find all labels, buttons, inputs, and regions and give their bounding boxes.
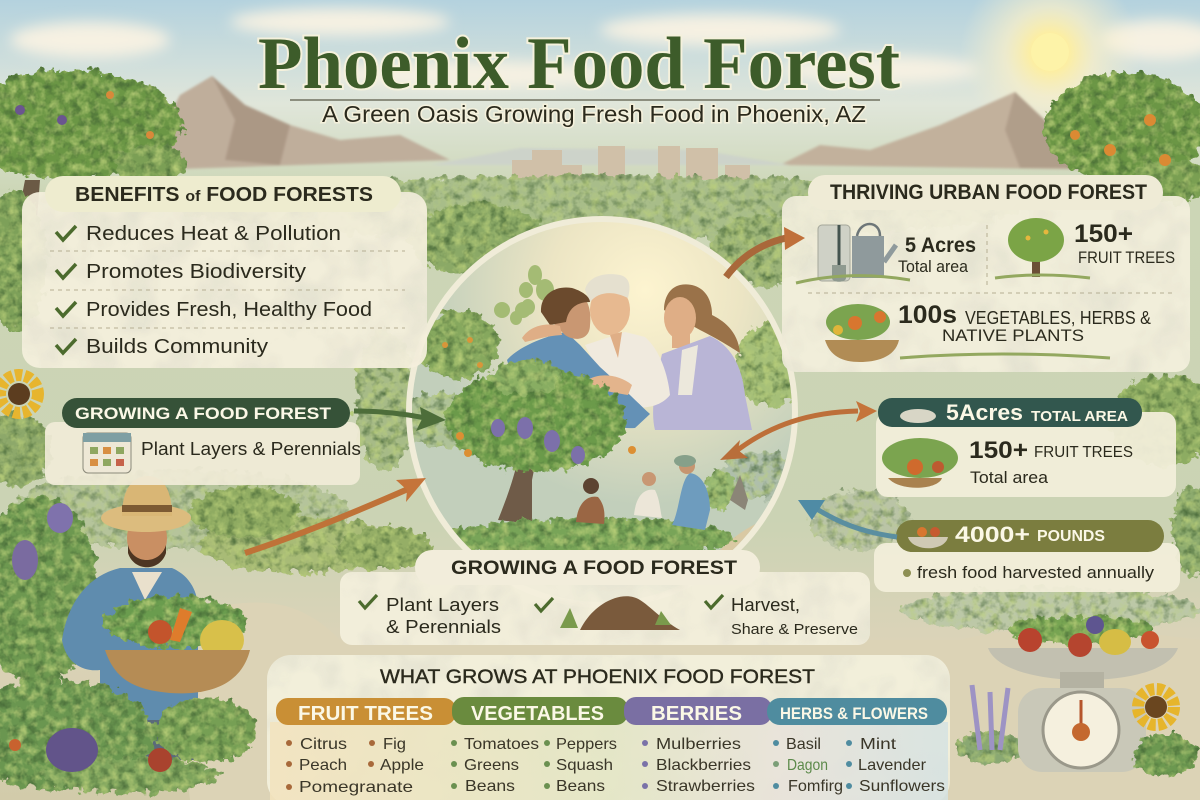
stat: 100s vegetables: 100s <box>898 301 957 329</box>
benefit list <box>50 223 405 358</box>
category: berries <box>624 697 772 795</box>
category: herbs and flowers <box>767 698 947 795</box>
panel: benefits of food forests <box>22 176 427 368</box>
basket of vegetables <box>103 596 250 693</box>
large tree with grapes <box>445 360 636 524</box>
stat: 100s vegetables: VEGETABLES, HERBS & <box>965 308 1151 328</box>
category: herbs and flowers: Sunflowers <box>859 778 945 795</box>
category: herbs and flowers: HERBS & FLOWERS <box>780 704 928 723</box>
icon: tools and watering can <box>796 224 910 283</box>
hanging vine <box>494 265 554 325</box>
arrow: blue <box>798 500 897 537</box>
panel: growing a food forest left <box>45 398 361 485</box>
heading pill <box>415 550 760 585</box>
step: plant layers <box>386 595 501 637</box>
category: fruit trees: Apple <box>380 757 424 774</box>
step: harvest: Harvest, <box>731 595 800 615</box>
shrubs: right side <box>1110 375 1200 575</box>
icon: compost pile <box>560 596 680 630</box>
category: fruit trees: FRUIT TREES <box>298 703 433 725</box>
heading pill: BENEFITS of FOOD FORESTS <box>75 184 373 206</box>
heading pill: 5Acres <box>946 400 1023 425</box>
icon: sunflower left <box>0 375 38 413</box>
arrow: orange from farmer <box>245 478 426 553</box>
panel: 5 acres total area: FRUIT TREES <box>1034 444 1133 461</box>
lower right still life <box>956 616 1197 777</box>
category: vegetables: Greens <box>464 757 519 774</box>
category: vegetables: VEGETABLES <box>471 703 604 725</box>
category: berries: BERRIES <box>651 703 742 725</box>
category: herbs and flowers: Fomfirg <box>788 778 843 795</box>
category: herbs and flowers: Dagon <box>787 757 828 774</box>
person: right woman <box>653 284 752 430</box>
heading pill <box>45 176 401 212</box>
category: vegetables: Tomatoes <box>464 736 539 753</box>
heading pill: GROWING A FOOD FOREST <box>75 404 332 423</box>
ground path <box>170 603 1200 800</box>
benefit list: Provides Fresh, Healthy Food <box>86 299 372 321</box>
heading pill <box>808 175 1163 210</box>
category: vegetables <box>451 697 628 795</box>
heading pill: GROWING A FOOD FOREST <box>451 558 737 579</box>
heading: WHAT GROWS AT PHOENIX FOOD FOREST <box>380 667 815 688</box>
category: herbs and flowers: Basil <box>786 736 821 753</box>
panel: 5 acres total area: Total area <box>970 468 1049 487</box>
tree: top right <box>1043 73 1200 202</box>
fruit bowl <box>1008 616 1159 657</box>
heading pill <box>62 398 350 428</box>
category: herbs and flowers: Lavender <box>858 757 927 774</box>
sun <box>960 0 1140 142</box>
panel: growing a food forest bottom <box>340 550 870 645</box>
category: fruit trees: Citrus <box>300 736 347 753</box>
shirt <box>62 568 198 720</box>
person: centre woman <box>585 274 670 408</box>
gardeners <box>452 455 756 550</box>
clouds <box>10 8 1200 89</box>
panel: thriving urban food forest <box>782 175 1190 372</box>
category: vegetables: Beans <box>465 778 515 795</box>
benefit list: Promotes Biodiversity <box>86 261 306 283</box>
person: man in blue <box>507 287 650 428</box>
panel: 4000+ pounds: fresh food harvested annually <box>917 563 1155 582</box>
midground foliage <box>10 176 1200 632</box>
small orange tree <box>400 311 804 499</box>
trees and plants <box>0 70 1200 685</box>
category: vegetables: Peppers <box>556 736 617 753</box>
arrow: green to circle <box>354 407 446 431</box>
icon: vegetables <box>882 438 958 488</box>
step: plant layers: Plant Layers <box>386 595 499 615</box>
stat: 150+ fruit trees: 150+ <box>1074 220 1133 248</box>
stat: 100s vegetables: NATIVE PLANTS <box>942 326 1084 345</box>
heading pill: POUNDS <box>1037 528 1105 545</box>
stat: 100s vegetables <box>898 301 1151 345</box>
category: fruit trees: Peach <box>299 757 347 774</box>
title: Phoenix Food Forest <box>258 23 900 105</box>
heading pill: THRIVING URBAN FOOD FOREST <box>830 181 1147 204</box>
step: plant layers: & Perennials <box>386 617 501 637</box>
category: fruit trees: Pomegranate <box>299 779 413 796</box>
central circular illustration <box>406 216 798 550</box>
column tints <box>270 722 948 800</box>
arrow: orange to thriving panel <box>726 227 805 277</box>
stat: 5 acres: Total area <box>898 257 968 276</box>
step: harvest <box>731 595 858 638</box>
benefit list: Builds Community <box>86 336 268 358</box>
arrows between panels <box>245 227 897 553</box>
heading pill: 4000+ <box>955 522 1030 547</box>
category: herbs and flowers: Mint <box>860 736 897 753</box>
city skyline <box>512 146 750 180</box>
category: berries: Mulberries <box>656 736 741 753</box>
head <box>127 512 167 564</box>
panel: 5 acres total area <box>876 398 1176 497</box>
panel: 5 acres total area: 150+ <box>969 437 1028 464</box>
icon: fruit tree <box>995 218 1090 278</box>
stat: 5 acres: 5 Acres <box>905 234 976 257</box>
stat: 5 acres <box>898 234 976 276</box>
foliage: left edge and grapes <box>0 414 433 685</box>
category: fruit trees: Fig <box>383 736 406 753</box>
mountains <box>150 76 1120 170</box>
tree: top left <box>0 70 186 330</box>
category: fruit trees <box>276 698 456 796</box>
icon: vegetable basket <box>825 304 1110 362</box>
farmer with basket <box>62 476 250 760</box>
panel: 4000+ pounds <box>874 520 1180 592</box>
foreground plants: lower left <box>0 680 257 793</box>
category: vegetables: Beans <box>556 778 605 795</box>
icon: calendar <box>83 433 131 473</box>
panel: what grows <box>267 655 950 800</box>
panel: growing a food forest left: Plant Layers & Perennials <box>141 439 361 459</box>
benefit list: Reduces Heat & Pollution <box>86 223 341 245</box>
arrow: double orange <box>720 401 877 460</box>
icon: kitchen scale <box>988 648 1178 772</box>
sky glow <box>412 222 792 550</box>
category: berries: Strawberries <box>656 778 755 795</box>
stat: 150+ fruit trees: FRUIT TREES <box>1078 248 1175 267</box>
heading pill: TOTAL AREA <box>1031 408 1128 425</box>
heading pill <box>878 398 1142 427</box>
hat <box>101 476 191 532</box>
sunflower and leaves <box>1133 689 1197 777</box>
subtitle: A Green Oasis Growing Fresh Food in Phoenix, AZ <box>322 101 866 127</box>
category: vegetables: Squash <box>556 757 613 774</box>
stat: 150+ fruit trees <box>1074 220 1175 267</box>
category: berries: Blackberries <box>656 757 751 774</box>
heading pill <box>896 520 1164 552</box>
step: harvest: Share & Preserve <box>731 621 858 638</box>
lavender <box>956 685 1024 764</box>
